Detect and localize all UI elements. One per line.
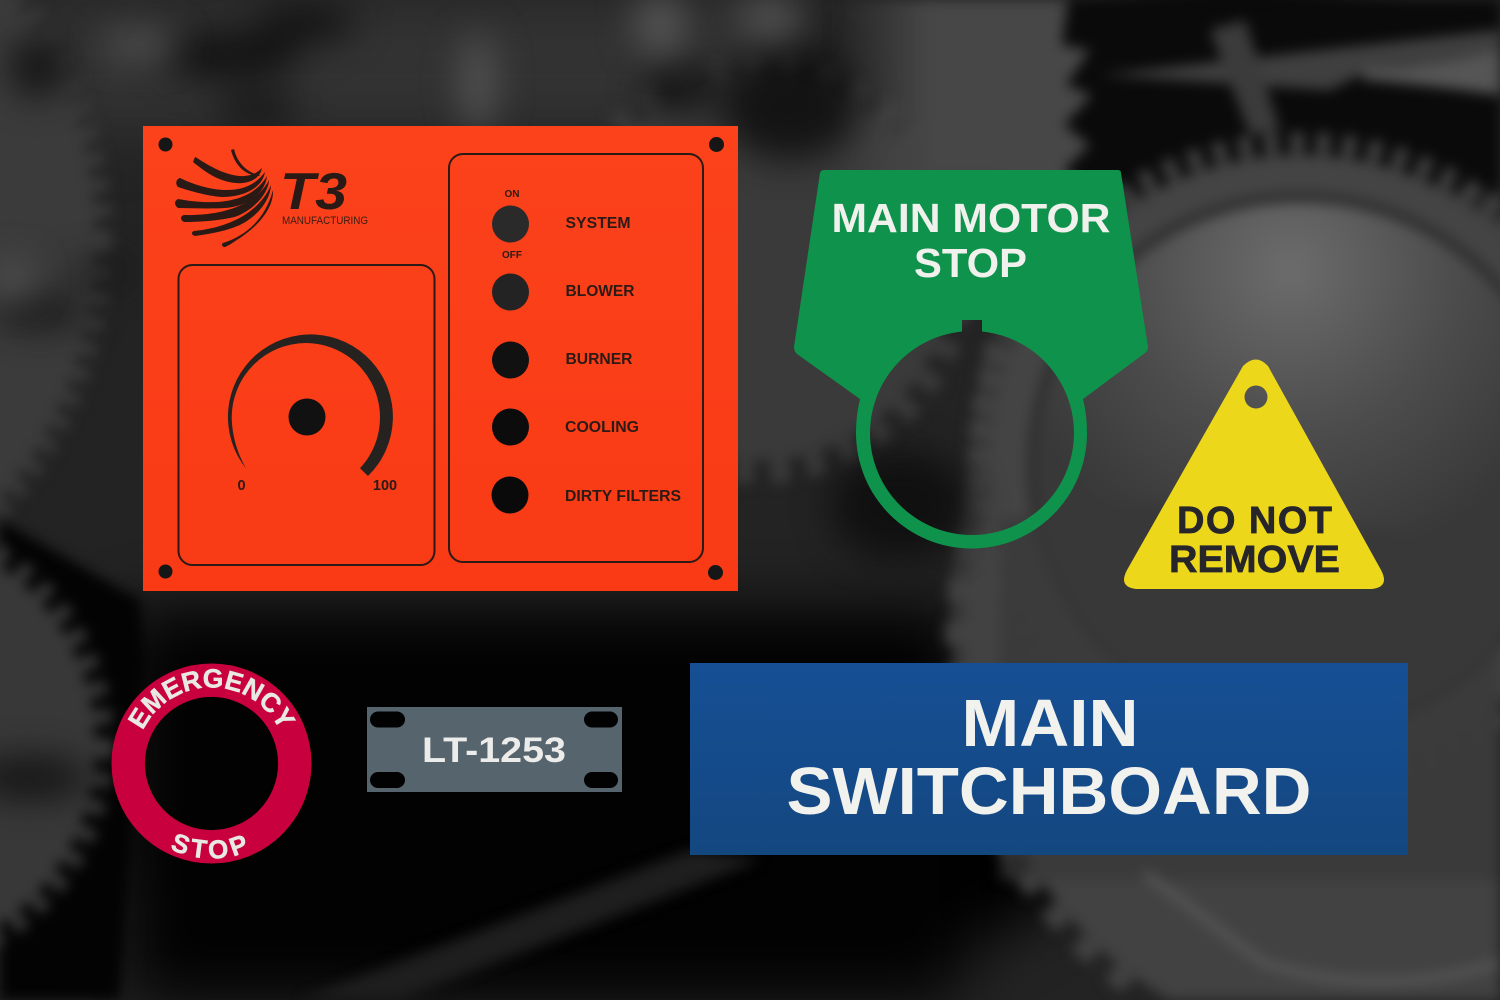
triangle tag text: DO NOT bbox=[1177, 500, 1332, 542]
indicator holes bbox=[492, 206, 529, 514]
sign text: SWITCHBOARD bbox=[786, 754, 1312, 829]
indicator labels: COOLING bbox=[565, 419, 639, 436]
indicator box bbox=[449, 154, 703, 562]
logo: T3 Manufacturing bbox=[175, 149, 368, 247]
panel: red emergency stop ring bbox=[112, 664, 312, 864]
off label: OFF bbox=[502, 250, 522, 261]
dial min label: 0 bbox=[237, 478, 246, 494]
panel: orange control faceplate bbox=[143, 126, 738, 591]
panel: blue main switchboard sign bbox=[690, 663, 1408, 855]
ring text: stop: STOP bbox=[172, 834, 246, 859]
green plate text: STOP bbox=[914, 240, 1027, 286]
panel: yellow do not remove triangle tag bbox=[1124, 360, 1384, 589]
logo subtitle: MANUFACTURING bbox=[282, 215, 368, 227]
indicator labels: SYSTEM bbox=[566, 215, 630, 232]
logo wordmark: T3 bbox=[280, 163, 347, 221]
dial box bbox=[178, 265, 434, 565]
green plate text: MAIN MOTOR bbox=[832, 195, 1110, 241]
indicator labels: BLOWER bbox=[566, 283, 634, 300]
logo swoosh bbox=[175, 149, 273, 247]
sign text bbox=[786, 686, 1312, 829]
dial knob hole bbox=[288, 398, 326, 436]
indicator labels bbox=[565, 215, 681, 505]
on label: ON bbox=[504, 189, 520, 200]
green plate text bbox=[832, 195, 1110, 286]
triangle tag text bbox=[1169, 500, 1340, 581]
panel: grey LT-1253 tag bbox=[367, 707, 622, 792]
dial scale arc bbox=[228, 334, 393, 476]
ring text: emergency: EMERGENCY bbox=[128, 668, 296, 730]
sign text: MAIN bbox=[962, 686, 1138, 761]
tag text: LT-1253 bbox=[422, 731, 566, 770]
dial max label: 100 bbox=[373, 478, 397, 494]
panel mounting holes bbox=[158, 137, 724, 580]
indicator labels: BURNER bbox=[566, 351, 632, 368]
indicator labels: DIRTY FILTERS bbox=[565, 488, 681, 505]
triangle tag text: REMOVE bbox=[1169, 539, 1340, 581]
panel: green main motor stop legend plate bbox=[794, 170, 1148, 548]
